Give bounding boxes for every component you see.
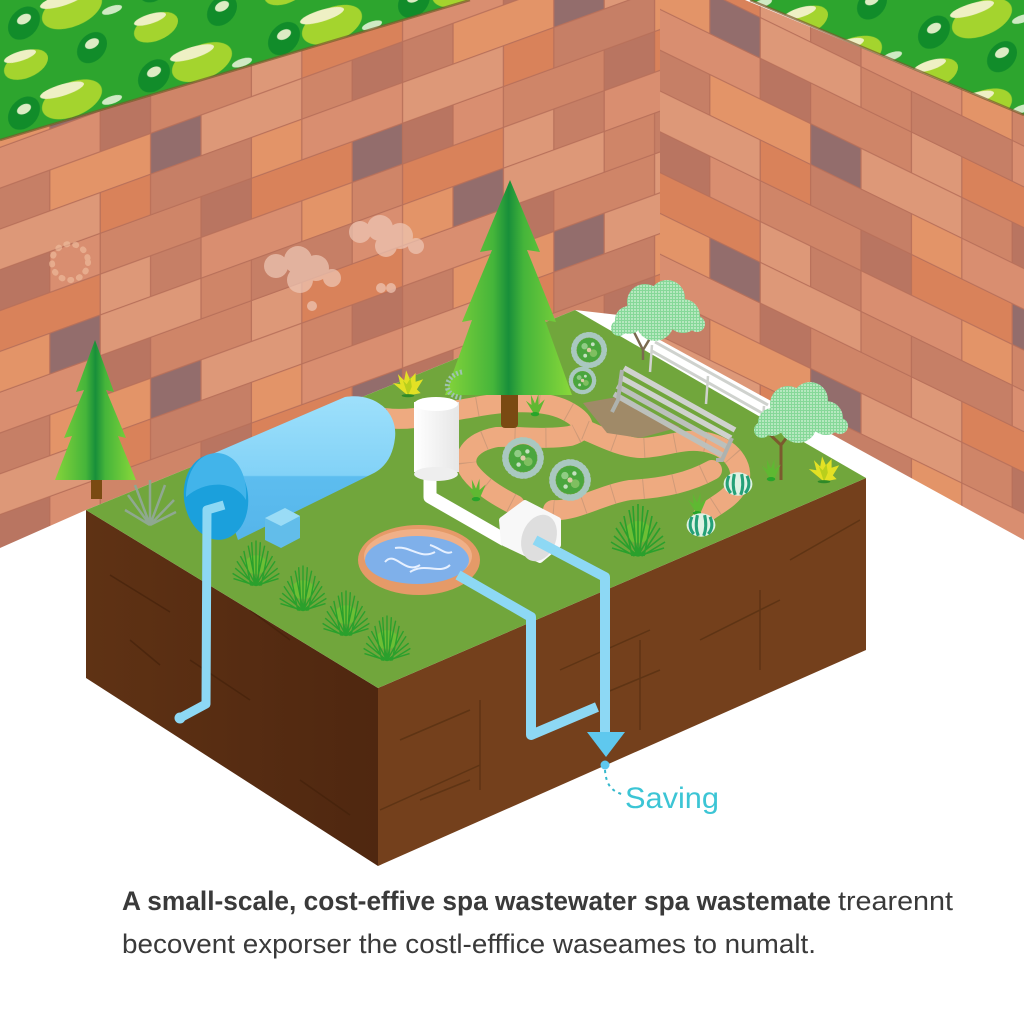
striped melons — [687, 472, 752, 537]
yellow tufts — [393, 370, 839, 483]
flower bushes — [505, 335, 604, 498]
grass top — [86, 310, 866, 688]
outlet pipe with arrow — [535, 540, 625, 757]
white filter tank — [414, 397, 505, 540]
tank box — [265, 508, 300, 548]
left wall foliage — [0, 0, 470, 140]
caption: trearennt — [838, 886, 954, 916]
caption: becovent exporser the costl-efffice waseames to numalt. — [122, 929, 816, 959]
small tufts — [467, 394, 781, 515]
garden path — [385, 402, 740, 515]
large pine tree — [445, 180, 572, 428]
tank outlet pipe — [174, 505, 224, 724]
ground block: soil and grass — [86, 310, 866, 866]
soil left face — [86, 510, 378, 866]
wall speckled patch — [52, 244, 88, 280]
scrub tree back — [611, 280, 705, 360]
soil right face — [378, 478, 866, 866]
agave plant — [125, 480, 176, 525]
left brick wall — [0, 0, 662, 548]
round pond — [358, 525, 480, 595]
pond drain pipe — [458, 575, 597, 735]
park bench — [612, 342, 768, 460]
grass tufts — [233, 504, 665, 661]
blue tank — [178, 396, 395, 548]
caption — [122, 886, 954, 959]
saving label — [600, 760, 719, 815]
scrub tree front — [754, 382, 848, 480]
ring shrub — [447, 372, 462, 398]
wall smoke clouds — [264, 215, 424, 311]
dirt patch — [583, 397, 680, 438]
white pump box — [502, 503, 563, 566]
saving label: Saving — [625, 782, 719, 815]
caption: A small-scale, cost-effive spa wastewater spa wastemate — [122, 886, 831, 916]
right brick wall — [620, 0, 1024, 540]
small pine tree — [55, 340, 136, 499]
right wall foliage — [750, 0, 1024, 115]
